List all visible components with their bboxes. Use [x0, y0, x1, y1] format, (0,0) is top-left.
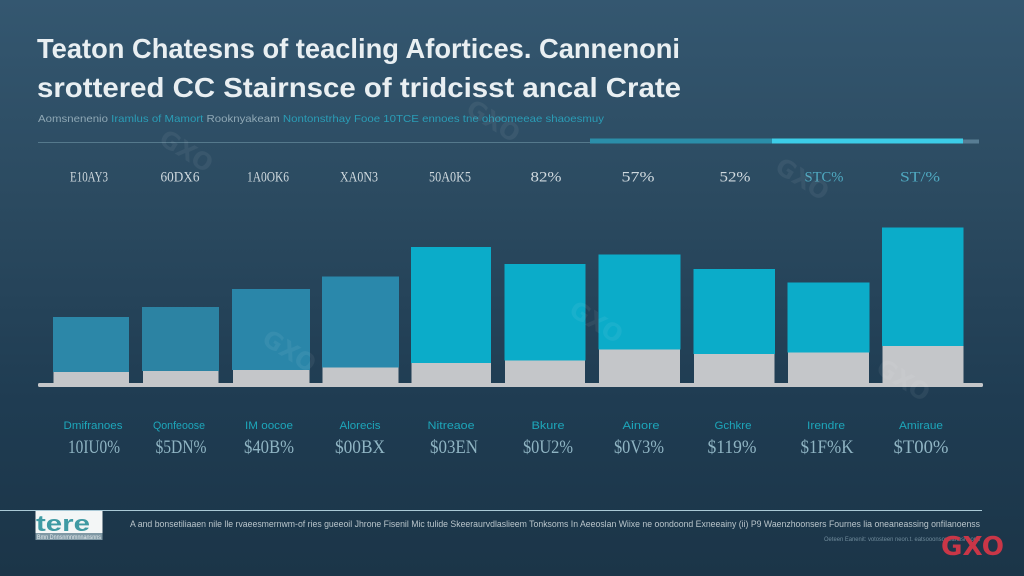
bar chart [38, 228, 983, 387]
category values [68, 437, 949, 458]
bar 5 [411, 247, 491, 387]
watermarks: GXO [564, 295, 628, 349]
category values: $119% [708, 437, 757, 458]
bar 3 [232, 289, 310, 387]
footer rule [0, 510, 982, 511]
logo [36, 511, 102, 541]
category labels [64, 420, 943, 432]
category values: $00BX [335, 437, 385, 458]
top value row: ST/% [900, 170, 940, 186]
bar 1 [53, 317, 129, 387]
category labels: Dmifranoes [64, 420, 123, 432]
bar 7 [598, 254, 680, 387]
top value row: E10AY3 [70, 170, 108, 186]
bar 8 [694, 269, 775, 387]
category values: 10IU0% [68, 437, 120, 458]
bar 9 [788, 282, 870, 387]
watermarks: GXO [257, 324, 321, 378]
top value row: 82% [530, 170, 562, 186]
bar 2 [142, 307, 219, 387]
footer note: A and bonsetiliaaen nile lle rvaeesmernwm-of ries gueeoil Jhrone Fisenil Mic tulide Skeeraurvdlaslieem Tonksoms In Aeeoslan Wiixe ne oondoond Exneeainy (ii) P9 Waenzhoonsers Fournes lia oneaneassing onfilanoenss [130, 519, 980, 529]
footer small note: Oeteen Eanenit: votosteen neon.t. eatsooonsoneannsnoons [824, 536, 981, 543]
watermarks: GXO [871, 353, 935, 407]
top value row: 60DX6 [160, 170, 200, 186]
bar 6 [504, 264, 586, 387]
top value row: 52% [720, 170, 750, 186]
category values: $03EN [430, 437, 478, 458]
top value row: XA0N3 [340, 170, 378, 186]
top value row: STC% [804, 170, 844, 186]
logo: tere [36, 511, 90, 536]
watermarks [154, 94, 935, 407]
title: Teaton Chatesns of teacling Afortices. Cannenoni [37, 33, 680, 64]
bar 4 [322, 276, 399, 387]
category values: $0U2% [523, 437, 573, 458]
category labels: IM oocoe [245, 420, 293, 432]
top value row: 50A0K5 [429, 170, 471, 186]
category labels: Alorecis [340, 420, 381, 432]
category labels: Qonfeoose [153, 420, 205, 432]
top value row [70, 170, 940, 186]
top value row: 1A0OK6 [247, 170, 289, 186]
logo: Bmn Dnnsnmnmnnansnns [37, 535, 101, 541]
category values: $0V3% [614, 437, 664, 458]
category values: $1F%K [800, 437, 854, 458]
title: srottered CC Stairnsce of tridcisst ancal Crate [37, 72, 681, 103]
category values: $5DN% [156, 437, 207, 458]
watermarks: GXO [154, 124, 218, 178]
category labels: Amiraue [899, 420, 943, 432]
category labels: Ainore [622, 420, 660, 432]
bar 10 [882, 228, 964, 387]
subtitle: Aomsnenenio Iramlus of Mamort Rooknyakeam Nontonstrhay Fooe 10TCE ennoes tne ohoomeeae shaoesmuy [38, 113, 605, 125]
category labels: Gchkre [714, 420, 752, 432]
top value row: 57% [622, 170, 654, 186]
category labels: Nitreaoe [428, 420, 474, 432]
progress rule [38, 138, 979, 144]
watermarks: GXO [770, 152, 834, 206]
category values: $T00% [894, 437, 949, 458]
title [37, 33, 681, 103]
watermarks: GXO [461, 94, 525, 148]
brand mark: GXO [941, 532, 1004, 562]
category labels: Irendre [807, 420, 845, 432]
category values: $40B% [244, 437, 294, 458]
baseline [38, 383, 983, 387]
category labels: Bkure [532, 420, 564, 432]
